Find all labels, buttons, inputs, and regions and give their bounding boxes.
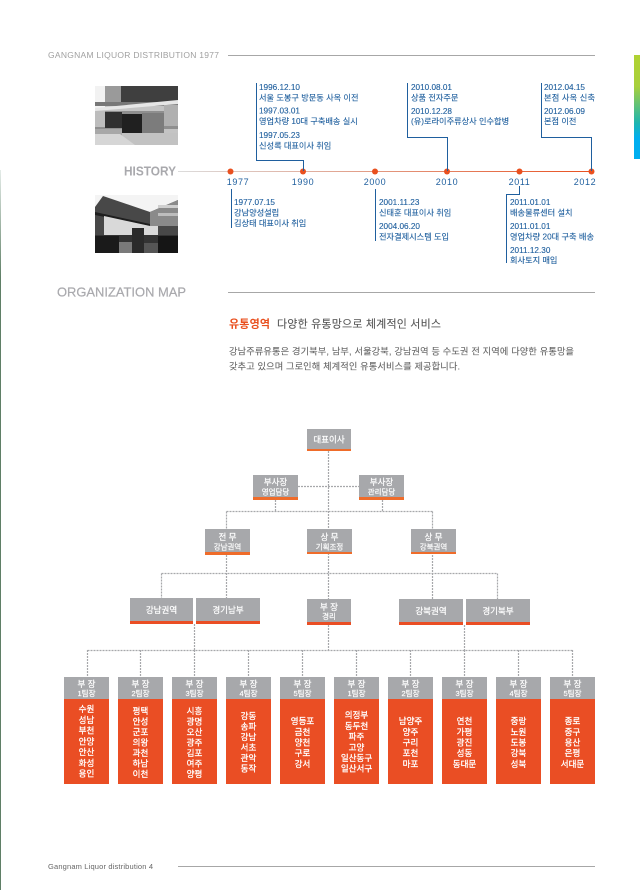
year labels: 1977 (227, 177, 249, 187)
callout: 1990: 신성록 대표이사 취임 (259, 140, 331, 150)
callout: 2010: (유)로라이주류상사 인수합병 (411, 116, 509, 126)
column: team 3 south: 광명 (187, 716, 202, 726)
column: team 2 north: 2팀장 (402, 688, 420, 698)
column: team 1 south: 성남 (79, 715, 94, 725)
callout: 1977: 1977.07.15 (234, 198, 275, 207)
column: team 3 north: 부 장 (455, 679, 474, 689)
section title: 유통영역 (229, 318, 270, 330)
column: team 5 north: 중구 (565, 727, 580, 737)
column: team 2 north: 구리 (403, 738, 418, 748)
column: team 5 north (550, 677, 595, 784)
column: team 3 north: 광진 (457, 738, 472, 748)
column: team 5 south: 5팀장 (294, 688, 312, 698)
column: team 3 south: 시흥 (187, 706, 202, 716)
box: CEO: 대표이사 (313, 434, 345, 444)
box: Gangnam region: 강남권역 (146, 605, 177, 615)
column: team 5 north: 용산 (565, 738, 580, 748)
box: VP admin: 부사장 (370, 477, 393, 487)
callout: 2011: 배송물류센터 설치 (510, 208, 573, 218)
box: Gyeonggi north: 경기북부 (482, 606, 514, 616)
callout: 2012: 2012.06.09 (544, 107, 585, 116)
column: team 3 south (172, 677, 217, 784)
box: VP sales: 부사장 (264, 477, 287, 487)
column: team 1 south: 부 장 (77, 679, 96, 689)
section title: 다양한 유통망으로 체계적인 서비스 (277, 318, 441, 330)
box: VP admin (359, 475, 404, 500)
box: Gangbuk region (399, 599, 463, 625)
box: director Gangnam: 강남권역 (214, 542, 241, 552)
callout: 2010 (408, 83, 509, 171)
column: team 2 south: 부 장 (131, 679, 150, 689)
column: team 3 south: 부 장 (185, 679, 204, 689)
column: team 5 north: 은평 (565, 748, 580, 758)
timeline points (228, 168, 594, 174)
box: Gyeonggi north (466, 599, 530, 625)
column: team 3 south: 오산 (187, 727, 202, 737)
callout: 1990 (256, 83, 358, 171)
column: team 2 north: 남양주 (399, 716, 422, 726)
column: team 1 north: 동두천 (345, 721, 368, 731)
column: team 4 south: 부 장 (239, 679, 258, 689)
column: team 4 south: 4팀장 (240, 688, 258, 698)
box: managing director planning: 상 무 (320, 532, 339, 542)
callout: 1990: 영업차량 10대 구축배송 실시 (259, 116, 358, 126)
box: managing director Gangbuk: 상 무 (424, 532, 443, 542)
box: accounting manager: 경리 (322, 611, 336, 621)
column: team 1 south: 안양 (79, 736, 94, 746)
callout: 2000: 2001.11.23 (379, 198, 420, 207)
timeline axis (178, 171, 592, 172)
org chart connectors (88, 451, 573, 677)
callout: 1990: 서울 도봉구 방문동 사옥 이전 (259, 92, 358, 102)
column: team 2 south: 안성 (133, 716, 148, 726)
column: team 1 north (334, 677, 379, 784)
callout: 1977 (232, 189, 306, 228)
page footer: Gangnam Liquor distribution 4 (48, 862, 153, 871)
box: director Gangnam (205, 529, 250, 555)
column: team 2 south: 평택 (133, 706, 148, 716)
column: team 1 south (64, 677, 109, 784)
column: team 4 north: 4팀장 (510, 688, 528, 698)
box: VP admin: 관리담당 (368, 486, 395, 496)
callout: 2000: 전자결제시스템 도입 (379, 232, 449, 242)
history heading: HISTORY (124, 164, 177, 178)
column: team 1 north: 일산동구 (341, 753, 372, 763)
column: team 4 north: 강북 (511, 748, 526, 758)
callout: 2010: 2010.12.28 (411, 107, 452, 116)
column: team 4 north: 도봉 (511, 738, 526, 748)
column: team 4 south: 강동 (241, 711, 256, 721)
column: team 1 south: 부천 (79, 726, 94, 736)
callout: 2011: 회사토지 매입 (510, 256, 557, 265)
column: team 4 north: 노원 (511, 727, 526, 737)
column: team 3 south: 여주 (187, 758, 202, 768)
column: team 5 north: 5팀장 (564, 688, 582, 698)
column: team 2 north: 마포 (403, 759, 418, 769)
box: Gangbuk region: 강북권역 (415, 606, 447, 616)
column: team 2 south: 2팀장 (132, 688, 150, 698)
column: team 2 north: 포천 (403, 748, 418, 758)
callout: 1977: 강남양성설립 (234, 208, 279, 218)
left edge line (0, 170, 1, 890)
callout: 2010: 상품 전자주문 (411, 92, 459, 102)
callout: 2011 (506, 186, 594, 265)
year labels: 2011 (509, 177, 530, 187)
callout: 2012: 본점 이전 (544, 116, 576, 126)
column: team 5 south: 강서 (295, 759, 310, 769)
box: managing director Gangbuk (411, 529, 456, 554)
callout: 2011: 2011.01.01 (510, 222, 551, 231)
column: team 5 south: 영등포 (291, 716, 314, 726)
callout: 1990: 1996.12.10 (259, 83, 300, 92)
callout: 2000 (376, 189, 451, 242)
column: team 3 north: 연천 (457, 716, 472, 726)
box: Gyeonggi south: 경기남부 (212, 605, 244, 615)
callout: 2011: 2011.12.30 (510, 246, 551, 255)
box: CEO (307, 429, 351, 451)
column: team 2 south: 이천 (133, 769, 148, 779)
section description: 갖추고 있으며 그로인해 체계적인 유통서비스를 제공합니다. (229, 360, 460, 372)
column: team 4 south: 서초 (241, 742, 256, 752)
year labels: 1990 (292, 177, 314, 187)
box: director Gangnam: 전 무 (218, 532, 237, 542)
column: team 2 north (388, 677, 433, 784)
box: VP sales (253, 475, 298, 500)
column: team 2 south: 군포 (133, 727, 148, 737)
photo: shop front sign (95, 195, 178, 253)
column: team 1 north: 1팀장 (348, 688, 366, 698)
column: team 2 south: 하남 (133, 758, 148, 768)
callout: 2011: 2011.01.01 (510, 198, 551, 207)
column: team 4 south: 송파 (241, 722, 256, 732)
column: team 3 north: 가평 (457, 727, 472, 737)
column: team 3 south: 3팀장 (186, 688, 204, 698)
column: team 4 south (226, 677, 271, 784)
callout: 1990: 1997.05.23 (259, 131, 300, 140)
column: team 1 north: 의정부 (345, 710, 368, 720)
history timeline (124, 164, 596, 187)
photo: old warehouse (95, 86, 178, 145)
column: team 4 north: 성북 (511, 759, 526, 769)
column: team 1 south: 수원 (79, 704, 94, 714)
column: team 5 north: 서대문 (561, 759, 584, 769)
column: team 3 north: 동대문 (453, 759, 476, 769)
column: team 1 north: 부 장 (347, 679, 366, 689)
column: team 2 north: 양주 (403, 727, 418, 737)
callout: 2012: 2012.04.15 (544, 83, 585, 92)
column: team 3 south: 광주 (187, 738, 202, 748)
box: Gangnam region (130, 598, 193, 624)
callout: 2011: 영업차량 20대 구축 배송 (510, 232, 594, 242)
column: team 2 south (118, 677, 163, 784)
column: team 1 south: 안산 (79, 747, 94, 757)
column: team 3 north: 성동 (457, 748, 472, 758)
column: team 5 north: 부 장 (563, 679, 582, 689)
column: team 1 north: 고양 (349, 742, 364, 752)
box: VP sales: 영업담당 (262, 486, 289, 496)
column: team 5 south (280, 677, 325, 784)
year labels: 2010 (436, 177, 458, 187)
callout: 1977: 김상태 대표이사 취임 (234, 218, 306, 228)
column: team 1 north: 파주 (349, 732, 364, 742)
callout: 2012: 본점 사옥 신축 (544, 92, 595, 102)
callout: 2012 (542, 83, 595, 171)
column: team 4 north (496, 677, 541, 784)
box: managing director Gangbuk: 강북권역 (420, 542, 447, 552)
box: Gyeonggi south (196, 598, 260, 624)
side colour tab (634, 55, 640, 159)
column: team 3 north: 3팀장 (456, 688, 474, 698)
callout: 2010: 2010.08.01 (411, 83, 452, 92)
column: team 4 south: 관악 (241, 753, 256, 763)
section description: 강남주류유통은 경기북부, 남부, 서울강북, 강남권역 등 수도권 전 지역에 다양한 유통망을 (229, 346, 574, 356)
box: accounting manager: 부 장 (320, 602, 338, 612)
column: team 5 south: 부 장 (293, 679, 312, 689)
column: team 3 south: 김포 (187, 748, 202, 758)
column: team 4 north: 중랑 (511, 716, 526, 726)
column: team 1 south: 1팀장 (78, 688, 96, 698)
column: team 1 south: 화성 (79, 758, 94, 768)
section description (229, 346, 574, 372)
year labels (227, 177, 596, 187)
box: managing director planning: 기획조정 (316, 542, 343, 552)
column: team 1 south: 용인 (79, 768, 94, 778)
column: team 5 south: 양천 (295, 738, 310, 748)
page header: GANGNAM LIQUOR DISTRIBUTION 1977 (48, 50, 219, 60)
column: team 5 south: 구로 (295, 748, 310, 758)
column: team 2 north: 부 장 (401, 679, 420, 689)
column: team 2 south: 의왕 (133, 738, 148, 748)
organization map heading: ORGANIZATION MAP (57, 286, 186, 300)
column: team 3 south: 양평 (187, 769, 202, 779)
column: team 3 north (442, 677, 487, 784)
callout: 2000: 2004.06.20 (379, 222, 420, 231)
column: team 5 north: 종로 (565, 716, 580, 726)
column: team 2 south: 과천 (133, 748, 148, 758)
box: managing director planning (307, 529, 352, 554)
box: accounting manager (307, 599, 351, 625)
callout: 2000: 신태훈 대표이사 취임 (379, 208, 451, 218)
year labels: 2000 (364, 177, 386, 187)
column: team 4 north: 부 장 (509, 679, 528, 689)
callout: 1990: 1997.03.01 (259, 106, 300, 116)
column: team 5 south: 금천 (295, 727, 310, 737)
column: team 4 south: 강남 (241, 732, 256, 742)
column: team 1 north: 일산서구 (341, 764, 372, 774)
column: team 4 south: 동작 (241, 764, 256, 774)
year labels: 2012 (574, 177, 596, 187)
